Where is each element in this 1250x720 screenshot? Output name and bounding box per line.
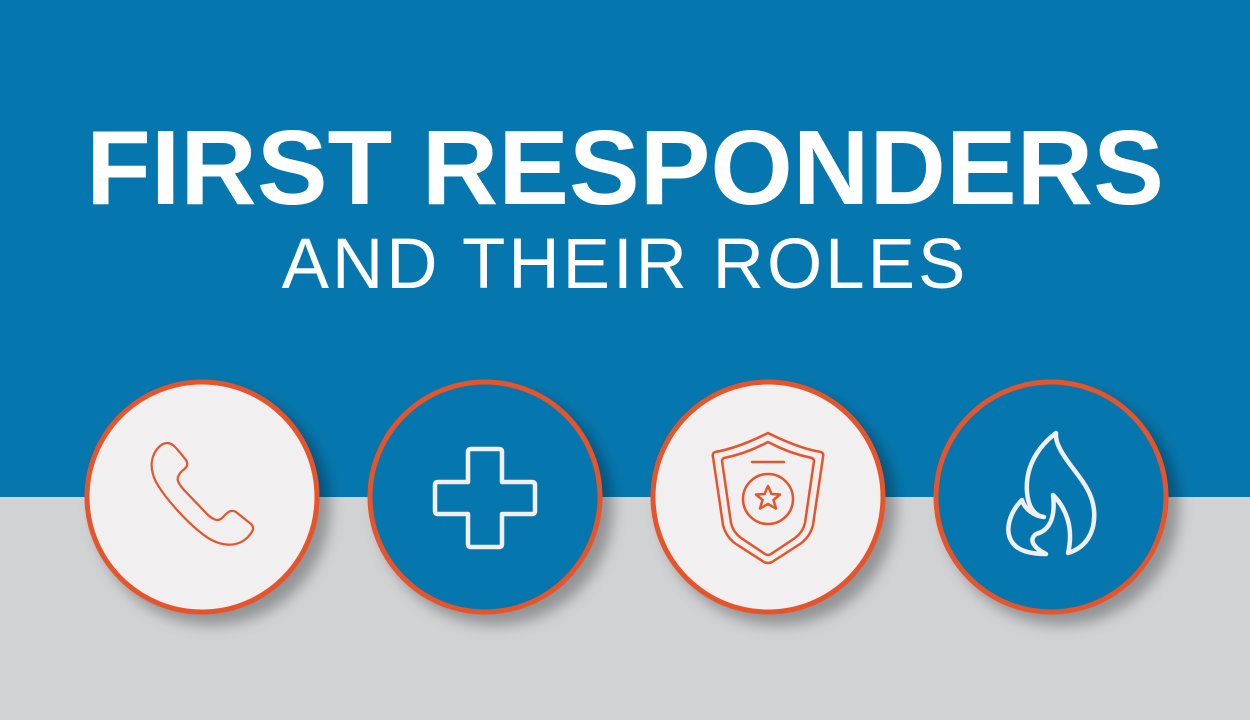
icon: medical cross circle bbox=[370, 382, 613, 625]
icon: flame circle bbox=[936, 382, 1179, 625]
icon: police shield circle bbox=[653, 382, 896, 625]
icon: phone circle bbox=[87, 382, 330, 625]
title: FIRST RESPONDERS bbox=[86, 109, 1164, 227]
subtitle: AND THEIR ROLES bbox=[282, 225, 968, 304]
